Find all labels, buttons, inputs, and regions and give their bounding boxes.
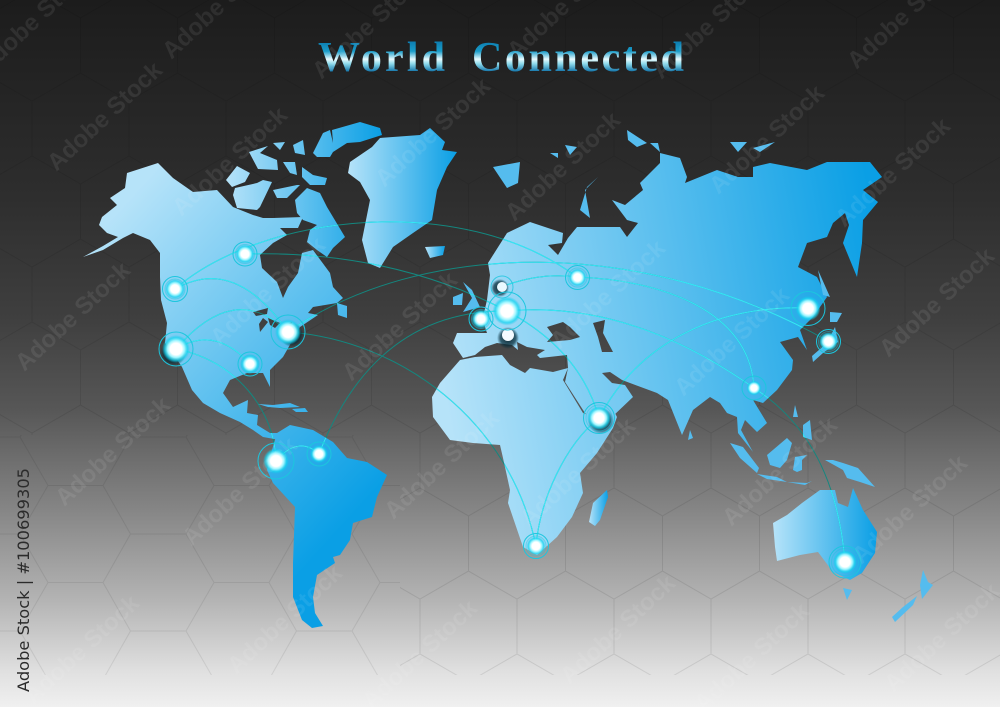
node: New York: [271, 315, 305, 349]
node: Sydney: [829, 546, 861, 578]
stock watermarks: Adobe Stock: [42, 56, 168, 176]
stock watermarks: Adobe Stock: [205, 231, 331, 351]
node: Horn of Africa: [584, 402, 614, 434]
Greenland: [348, 128, 457, 268]
South America: [267, 425, 387, 628]
node: Tokyo: [816, 330, 840, 354]
node: central Europe: [488, 292, 526, 330]
stock watermarks: Adobe Stock: [10, 256, 136, 376]
node: Hong Kong: [742, 376, 766, 400]
node: Seattle: [162, 276, 188, 302]
node: Colombia: [258, 443, 294, 479]
node: Rome: [497, 327, 519, 349]
arcs over land: [175, 222, 845, 562]
node: north China: [791, 292, 825, 326]
stock watermarks: Adobe Stock: [704, 79, 830, 199]
stock watermarks: Adobe Stock: [555, 569, 681, 689]
stock watermarks: Adobe Stock: [545, 234, 671, 354]
Newfoundland: [337, 303, 347, 318]
stock watermarks: Adobe Stock: [177, 431, 303, 551]
stock watermarks: Adobe Stock: [337, 266, 463, 386]
vertical stock id text: Adobe Stock | #100699305: [14, 468, 33, 692]
stock watermarks: Adobe Stock: [370, 72, 496, 192]
stock watermarks: Adobe Stock: [222, 559, 348, 679]
node: Scandinavia: [491, 276, 513, 298]
stock watermarks: Adobe Stock: [874, 242, 1000, 362]
Asia-Pacific and European islands: [453, 130, 933, 622]
Caribbean islands: [258, 403, 308, 412]
Eurasia: [453, 153, 882, 452]
Australia: [773, 488, 877, 580]
Madagascar: [589, 490, 608, 526]
node: Venezuela: [307, 442, 331, 466]
node: Los Angeles: [159, 332, 193, 366]
North America: [83, 163, 343, 440]
stock watermarks: Adobe Stock: [847, 449, 973, 569]
stock watermarks: Adobe Stock: [50, 391, 176, 511]
title: World: [318, 35, 445, 81]
city nodes: [159, 242, 861, 578]
node: Houston: [238, 352, 262, 376]
Africa: [432, 355, 617, 555]
stock watermarks: Adobe Stock: [500, 106, 626, 226]
stock watermarks: Adobe Stock: [669, 281, 795, 401]
node: northern Canada: [233, 242, 257, 266]
stock watermarks: Adobe Stock: [19, 589, 145, 707]
connection arcs: [175, 222, 845, 562]
stock watermarks: Adobe Stock: [830, 112, 956, 232]
node: London: [469, 307, 493, 331]
world map: [83, 122, 933, 628]
stock watermarks: Adobe Stock: [515, 412, 641, 532]
Canadian Arctic islands: [226, 122, 382, 257]
node: Cape Town: [524, 534, 548, 558]
title: Connected: [472, 35, 684, 81]
stock watermarks: Adobe Stock: [717, 411, 843, 531]
arcs over ocean: [175, 222, 845, 562]
stock watermarks: Adobe Stock: [167, 101, 293, 221]
stock watermarks: Adobe Stock: [379, 404, 505, 524]
node: Moscow: [566, 266, 590, 290]
Iceland: [425, 246, 445, 258]
